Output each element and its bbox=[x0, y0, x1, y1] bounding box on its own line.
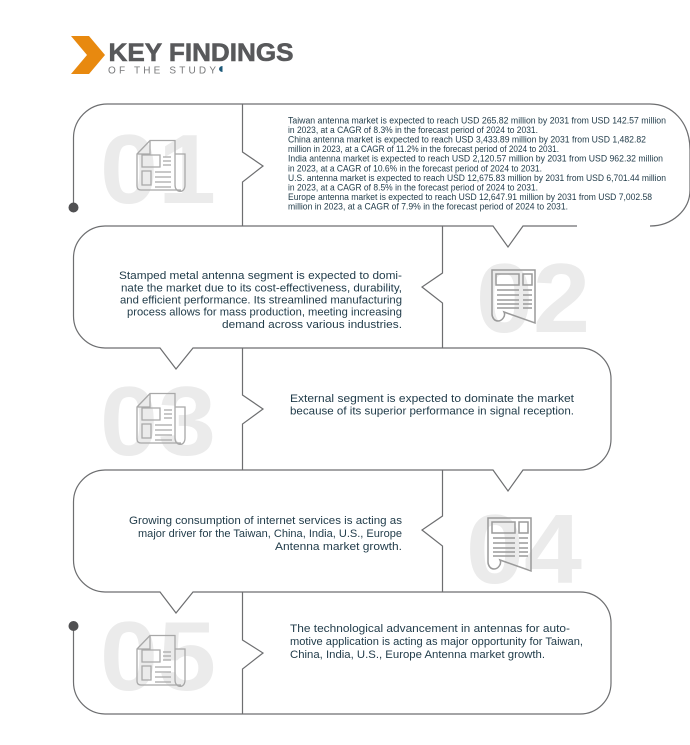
panel 4 outline bbox=[74, 470, 442, 613]
panel 2 text: and efficient performance. Its streamlined manufacturing bbox=[120, 294, 402, 306]
icon: newspaper 2 bbox=[492, 270, 535, 323]
panel 5 divider with arrow bbox=[242, 592, 263, 714]
panel 5 text: The technological advancement in antennas for auto- bbox=[290, 623, 570, 635]
panel 1 text: million in 2023, at a CAGR of 11.2% in the forecast period of 2024 to 2031. bbox=[288, 144, 559, 154]
panel 1: Taiwan, China, India, U.S., Europe market sizes bbox=[68, 104, 690, 247]
panel 4 number: 04 bbox=[466, 494, 582, 604]
panel 4 text: Antenna market growth. bbox=[275, 541, 402, 553]
panel 3 text: External segment is expected to dominate the market bbox=[290, 393, 574, 405]
panel 1 text: Taiwan antenna market is expected to reach USD 265.82 million by 2031 from USD 142.57 million bbox=[288, 115, 666, 125]
panel 5: technological advancement opportunity bbox=[68, 592, 611, 714]
subtitle: OF THE STUDY bbox=[108, 66, 216, 76]
panel 1 number: 01 bbox=[100, 114, 216, 224]
icon: orange chevron bbox=[71, 36, 105, 74]
panel 1 text: U.S. antenna market is expected to reach USD 12,675.83 million by 2031 from USD 6,701.44 million bbox=[288, 173, 666, 183]
panel 2 text: demand across various industries. bbox=[222, 319, 402, 331]
panel 1 text: India antenna market is expected to reach USD 2,120.57 million by 2031 from USD 962.32 million bbox=[288, 154, 663, 164]
panel 5 text: China, India, U.S., Europe Antenna market growth. bbox=[290, 649, 545, 661]
panel 1 text: China antenna market is expected to reach USD 3,433.89 million by 2031 from USD 1,482.82 bbox=[288, 134, 646, 144]
panel 2 text bbox=[119, 270, 402, 331]
panel 4 text: Growing consumption of internet services is acting as bbox=[129, 515, 403, 527]
title: KEY FINDINGS bbox=[108, 39, 294, 67]
icon: small dot bbox=[219, 66, 222, 72]
panel 5 text: motive application is acting as major opportunity for Taiwan, bbox=[290, 636, 583, 648]
panel 2 text: process allows for mass production, meeting increasing bbox=[127, 307, 402, 319]
panel 5 text bbox=[290, 623, 583, 661]
panel 1 text: in 2023, at a CAGR of 8.3% in the forecast period of 2024 to 2031. bbox=[288, 125, 538, 135]
icon: newspaper 4 bbox=[488, 518, 531, 571]
panel 2 number: 02 bbox=[476, 243, 590, 353]
panel 1 text: in 2023, at a CAGR of 10.6% in the forecast period of 2024 to 2031. bbox=[288, 163, 542, 173]
panel 3: external segment bbox=[100, 348, 611, 491]
panel 3 outline bbox=[105, 348, 611, 491]
panel 3 text bbox=[290, 393, 574, 418]
icon: newspaper 5 bbox=[137, 636, 185, 686]
panel 4 divider with arrow bbox=[422, 470, 442, 592]
panel 5 dot bbox=[68, 621, 78, 631]
panel 1 outline bbox=[74, 104, 690, 247]
panel 2 divider with arrow bbox=[422, 226, 442, 348]
panel 2: stamped metal antenna segment bbox=[74, 226, 590, 369]
header bbox=[71, 36, 294, 76]
panel 2 text: nate the market due to its cost-effectiveness, durability, bbox=[121, 282, 402, 294]
panel 2 text: Stamped metal antenna segment is expected to domi- bbox=[119, 270, 402, 282]
panel 5 number: 05 bbox=[100, 601, 216, 711]
panel 1 dot bbox=[68, 202, 78, 212]
panel 1 text: Europe antenna market is expected to reach USD 12,647.91 million by 2031 from USD 7,002.58 bbox=[288, 192, 652, 202]
panel 4 text bbox=[129, 515, 403, 553]
panel 3 text: because of its superior performance in signal reception. bbox=[290, 406, 574, 418]
panel 1 text bbox=[288, 115, 666, 212]
icon: newspaper 3 bbox=[137, 394, 185, 444]
panel 1 text: in 2023, at a CAGR of 8.5% in the forecast period of 2024 to 2031. bbox=[288, 182, 538, 192]
panel 5 outline bbox=[74, 592, 611, 714]
panel 1 divider with arrow bbox=[242, 104, 263, 226]
panel 1 text: million in 2023, at a CAGR of 7.9% in the forecast period of 2024 to 2031. bbox=[288, 202, 568, 212]
panel 3 divider with arrow bbox=[242, 348, 263, 470]
panel 3 number: 03 bbox=[100, 366, 216, 476]
icon: newspaper 1 bbox=[137, 140, 185, 191]
panel 4: internet services driver bbox=[74, 470, 582, 613]
panel 4 text: major driver for the Taiwan, China, India, U.S., Europe bbox=[138, 528, 402, 540]
panel 2 outline bbox=[74, 226, 442, 369]
